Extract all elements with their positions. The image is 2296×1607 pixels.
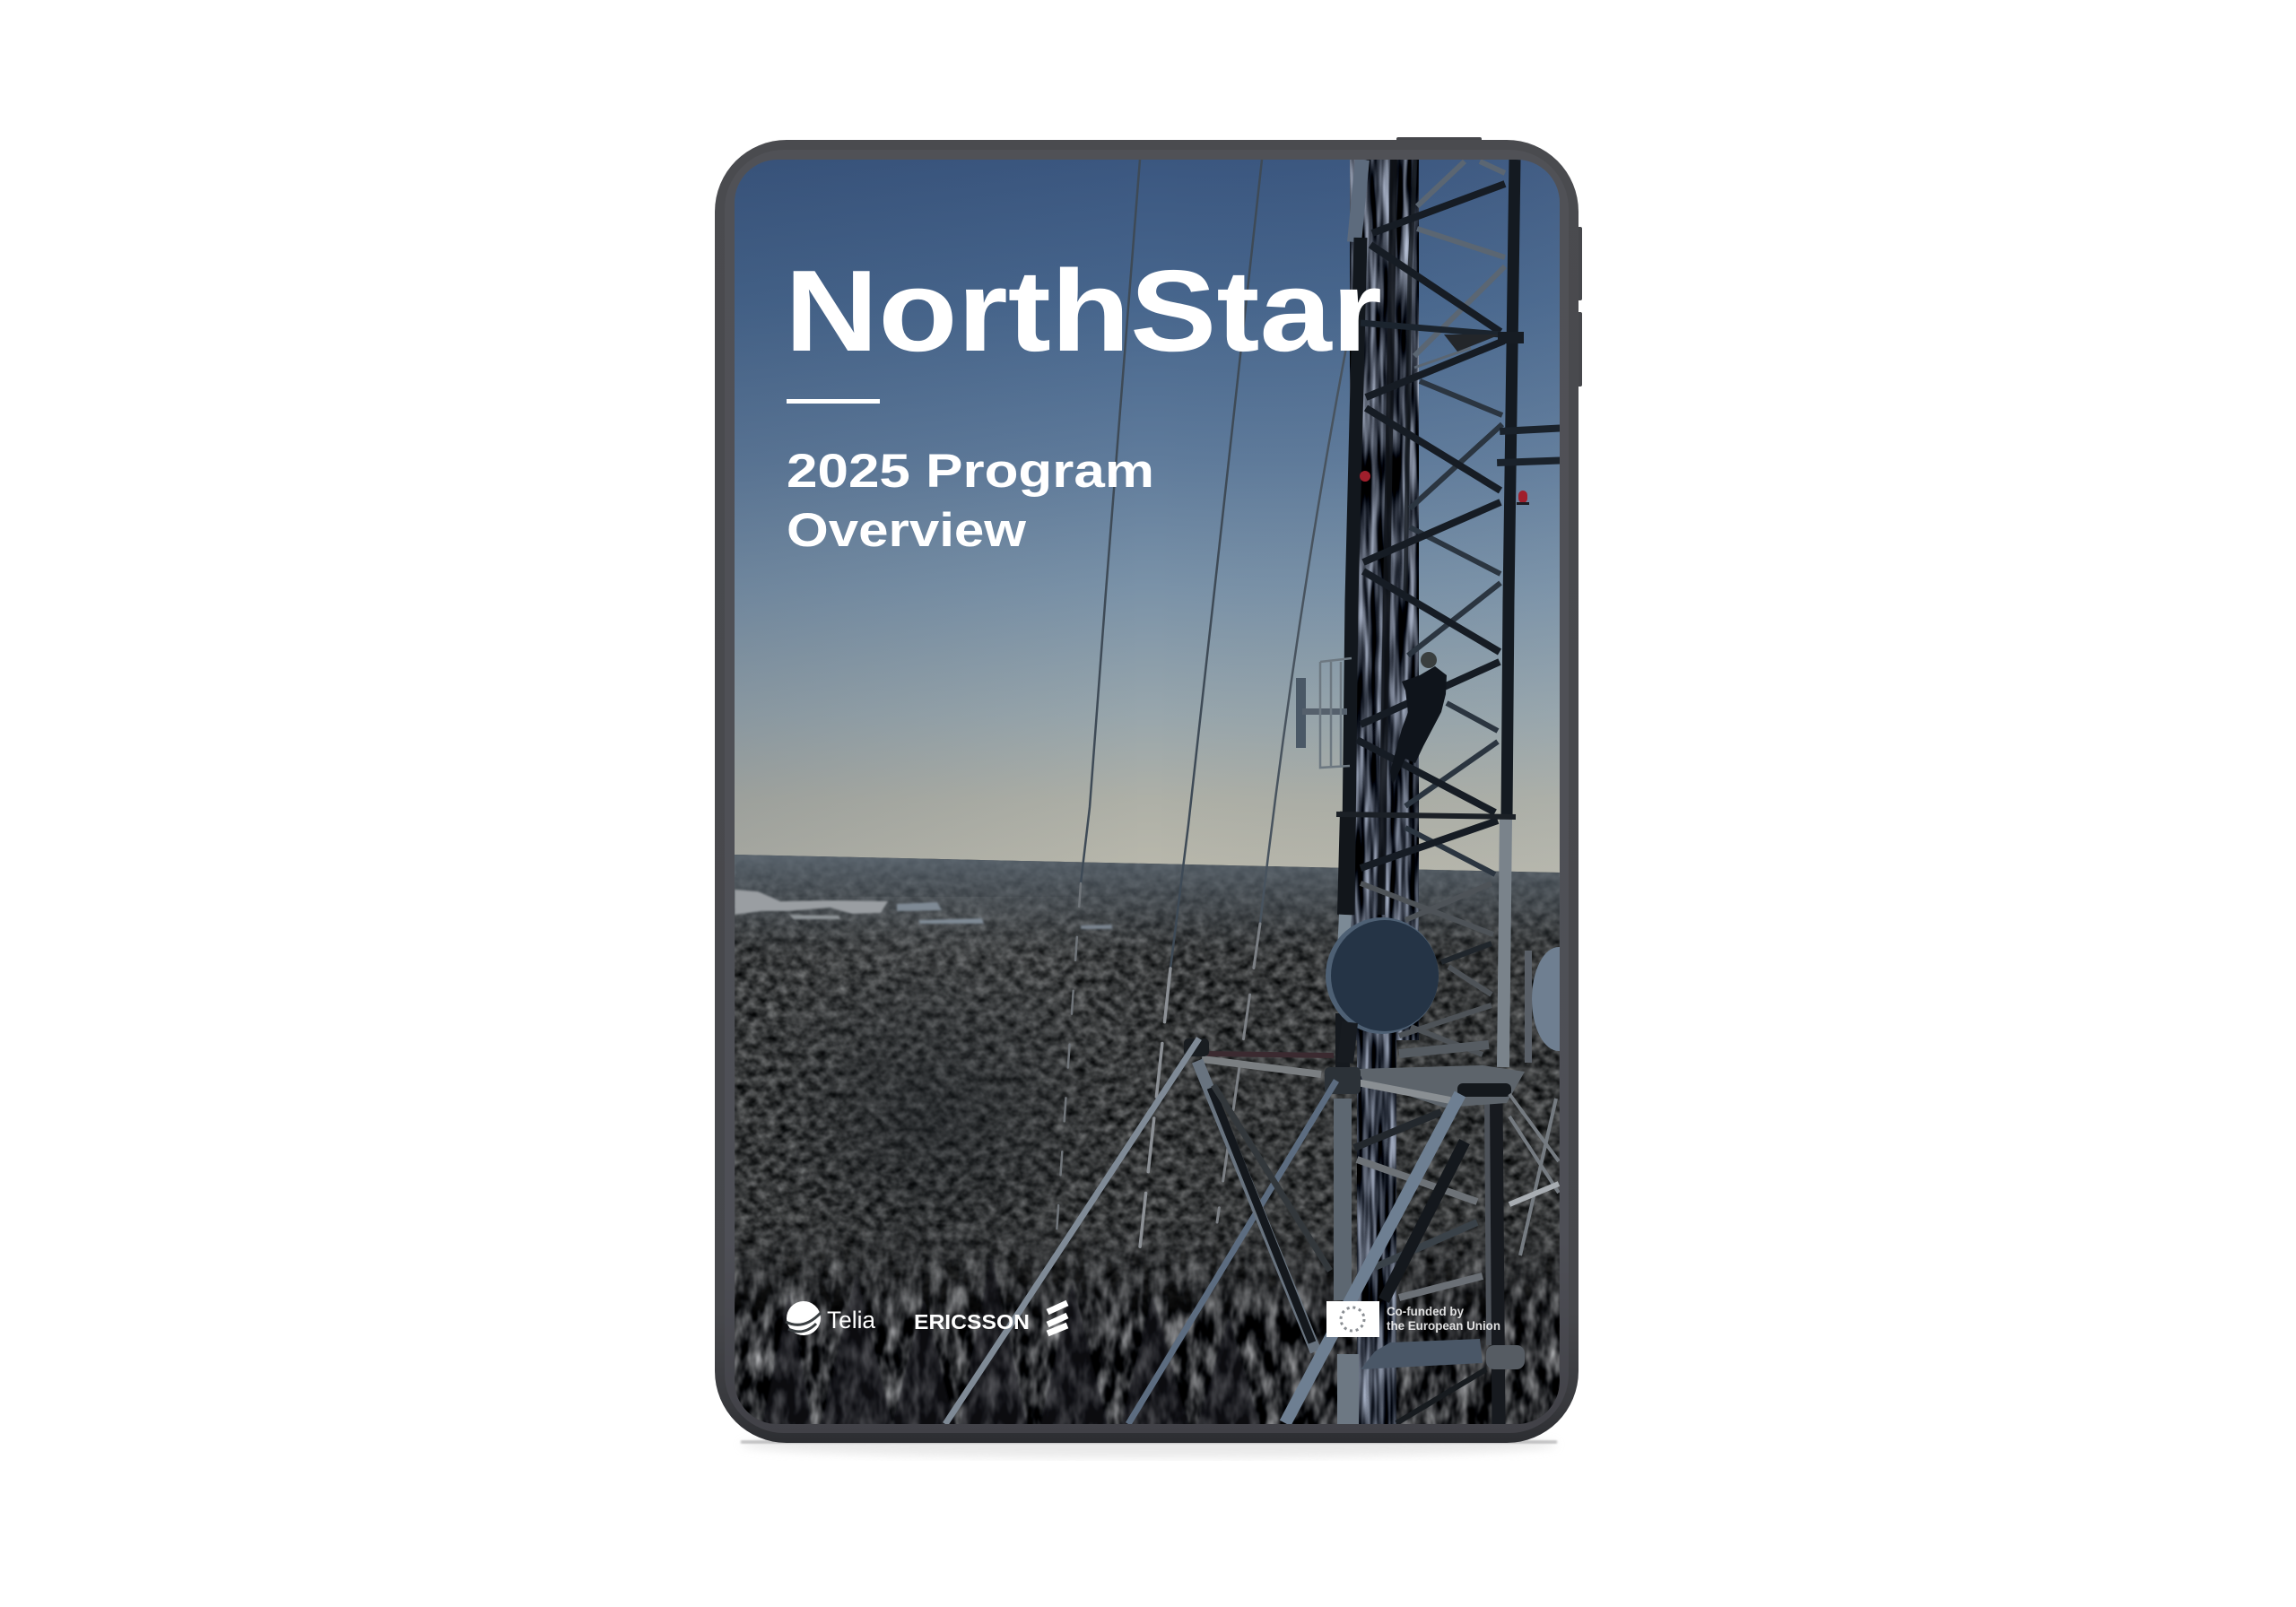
tower right leg — [1487, 160, 1515, 1426]
subtitle: 2025 Program — [787, 445, 1154, 498]
outer bezel — [715, 140, 1578, 1443]
volume down button — [1574, 312, 1582, 387]
panel antenna and cage — [1296, 658, 1352, 768]
snowy clearing — [735, 890, 1112, 929]
title divider — [787, 399, 880, 404]
subtitle: Overview — [787, 504, 1027, 557]
infographic canvas — [715, 137, 1582, 1460]
subtitle — [787, 445, 1154, 557]
tower lattice braces — [1336, 161, 1516, 1055]
tablet device frame — [715, 137, 1582, 1443]
EU text — [1387, 1305, 1500, 1333]
EU flag — [1326, 1301, 1379, 1337]
foreground conifers — [735, 1220, 1560, 1426]
volume up button — [1574, 227, 1582, 300]
forest landscape — [735, 852, 1560, 1426]
sky — [735, 160, 1560, 877]
tower mast core — [1343, 160, 1419, 1426]
EU text: the European Union — [1387, 1319, 1500, 1333]
red aviation lights — [1360, 471, 1529, 505]
lower support struts — [945, 1038, 1559, 1424]
logo: Telia: Telia — [827, 1307, 876, 1333]
lower tower plate — [1361, 1339, 1525, 1369]
screen photo — [735, 160, 1586, 1426]
title: NorthStar — [785, 247, 1382, 376]
tower bracket hub — [1444, 332, 1560, 466]
tablet shadow — [741, 1431, 1557, 1458]
logo: EU co-funded — [1326, 1301, 1500, 1337]
logo: Ericsson — [914, 1303, 1067, 1333]
microwave dish — [1326, 917, 1439, 1034]
transmission wires — [1056, 160, 1361, 1255]
top power button — [1396, 137, 1482, 144]
climbing technician — [1390, 652, 1447, 785]
right edge dish — [1525, 947, 1560, 1063]
logo: Ericsson: ERICSSON — [914, 1310, 1030, 1333]
EU text: Co-funded by — [1387, 1305, 1464, 1318]
tower platform — [1184, 1022, 1525, 1108]
logo: Telia — [782, 1297, 876, 1340]
inner bezel ring — [725, 150, 1569, 1433]
